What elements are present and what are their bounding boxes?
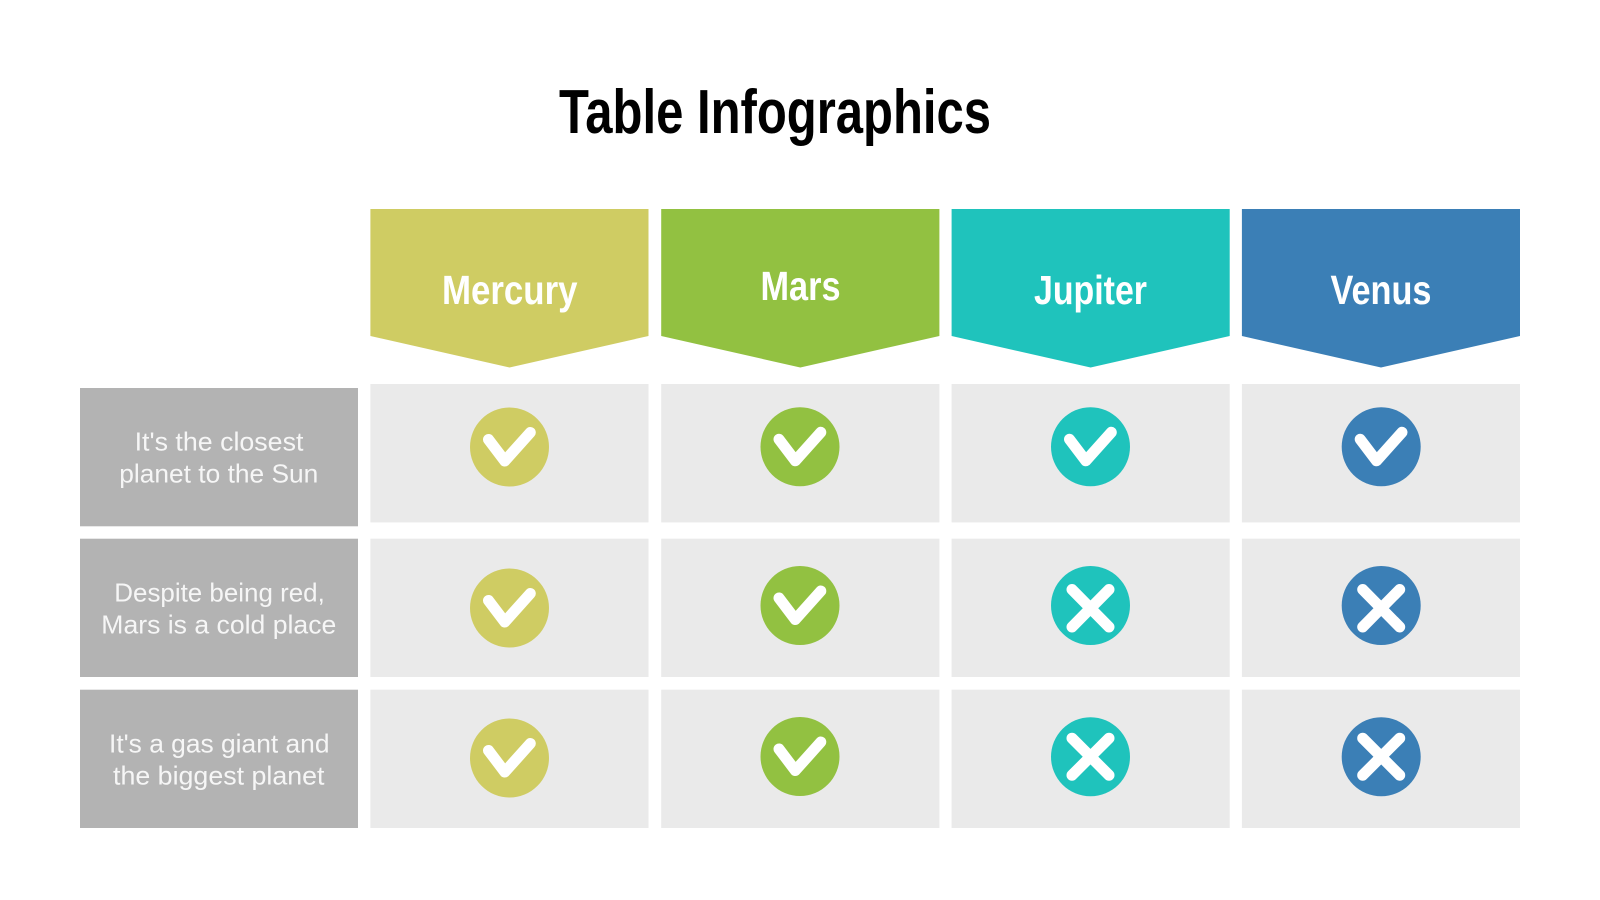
cell: row 2 Mars yes <box>661 539 939 677</box>
cell: row 3 Mars yes <box>661 690 939 828</box>
row label: closest planet: planet to the Sun <box>119 458 318 488</box>
row label: gas giant: the biggest planet <box>113 760 325 790</box>
cell: row 1 Mars yes <box>661 384 939 522</box>
column header: Mars <box>661 209 939 368</box>
column header: Mercury: Mercury <box>442 267 578 313</box>
cell: row 1 Mercury yes <box>370 384 648 522</box>
column header: Jupiter: Jupiter <box>1034 267 1147 313</box>
row label: gas giant: It's a gas giant and <box>109 728 330 758</box>
row label: Mars cold: Mars is a cold place <box>101 609 336 639</box>
column header: Mercury <box>370 209 648 368</box>
cell: row 3 Jupiter no <box>952 690 1230 828</box>
row label: Mars cold <box>80 539 358 677</box>
row label: gas giant <box>80 690 358 828</box>
column header: Venus <box>1242 209 1520 368</box>
row label: Mars cold: Despite being red, <box>114 577 325 607</box>
cell: row 2 Jupiter no <box>952 539 1230 677</box>
column header: Jupiter <box>952 209 1230 368</box>
cell: row 1 Venus yes <box>1242 384 1520 522</box>
cell: row 1 Jupiter yes <box>952 384 1230 522</box>
cell: row 3 Mercury yes <box>370 690 648 828</box>
cell: row 3 Venus no <box>1242 690 1520 828</box>
cell: row 2 Mercury yes <box>370 539 648 677</box>
column header: Mars: Mars <box>760 263 840 309</box>
cell: row 2 Venus no <box>1242 539 1520 677</box>
column header: Venus: Venus <box>1330 267 1432 313</box>
row label: closest planet: It's the closest <box>135 427 304 457</box>
row label: closest planet <box>80 388 358 526</box>
title: Table Infographics <box>559 78 991 147</box>
